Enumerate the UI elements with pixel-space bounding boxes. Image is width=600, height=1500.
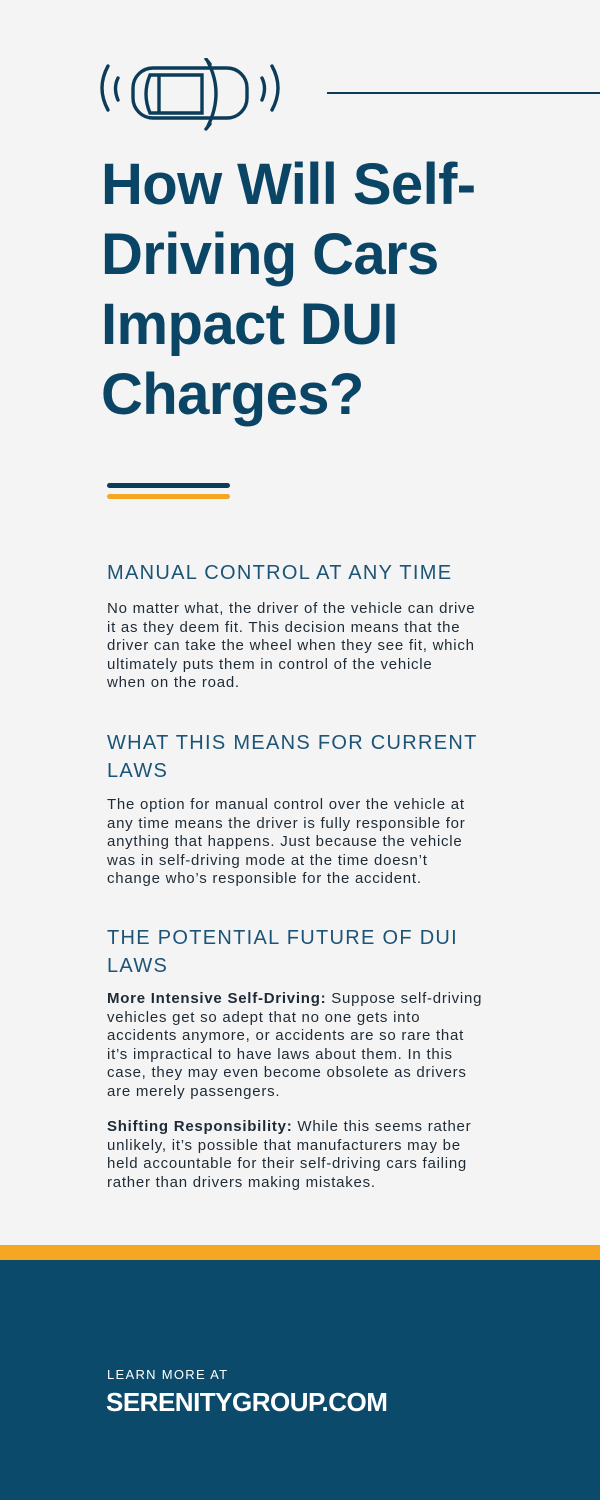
text: shifting responsibility: unlikely, it’s possible that manufacturers may be	[107, 1137, 461, 1154]
text: more intensive self-driving: case, they may even become obsolete as drivers	[107, 1064, 467, 1081]
footer label: LEARN MORE AT	[107, 1367, 228, 1382]
heading: manual control: MANUAL CONTROL AT ANY TIME	[107, 562, 452, 584]
header rule	[327, 92, 600, 94]
text: manual control: ultimately puts them in control of the vehicle	[107, 656, 432, 673]
text: shifting responsibility: rather than drivers making mistakes.	[107, 1174, 376, 1191]
text: more intensive self-driving: More Intensive Self-Driving: Suppose self-driving	[107, 990, 482, 1007]
icon: self-driving car	[100, 58, 280, 131]
text: manual control: it as they deem fit. This decision means that the	[107, 619, 460, 636]
text: more intensive self-driving: vehicles get so adept that no one gets into	[107, 1009, 420, 1026]
text: more intensive self-driving: it’s impractical to have laws about them. In this	[107, 1046, 453, 1063]
text: current laws: was in self-driving mode at the time doesn’t	[107, 852, 428, 869]
text: current laws: The option for manual control over the vehicle at	[107, 796, 465, 813]
footer	[0, 1245, 600, 1500]
text: current laws	[107, 796, 465, 887]
title: How Will Self-Driving Cars Impact DUI Charges?	[101, 152, 476, 427]
heading: future of DUI laws: THE POTENTIAL FUTURE OF DUI LAWS	[107, 927, 458, 977]
text: more intensive self-driving: are merely passengers.	[107, 1083, 280, 1100]
accent bars	[107, 483, 230, 499]
text: shifting responsibility: held accountable for their self-driving cars failing	[107, 1155, 467, 1172]
text: manual control: driver can take the wheel when they see fit, which	[107, 637, 475, 654]
text: more intensive self-driving	[107, 990, 482, 1100]
text: manual control: when on the road.	[107, 674, 240, 691]
text: more intensive self-driving: accidents anymore, or accidents are so rare that	[107, 1027, 464, 1044]
text: manual control	[107, 600, 475, 691]
text: current laws: any time means the driver is fully responsible for	[107, 815, 465, 832]
footer url: SERENITYGROUP.COM	[106, 1387, 387, 1417]
text: shifting responsibility	[107, 1118, 471, 1191]
text: shifting responsibility: Shifting Responsibility: While this seems rather	[107, 1118, 471, 1135]
heading: current laws: WHAT THIS MEANS FOR CURRENT LAWS	[107, 732, 477, 782]
text: current laws: anything that happens. Just because the vehicle	[107, 833, 462, 850]
text: manual control: No matter what, the driver of the vehicle can drive	[107, 600, 475, 617]
text: current laws: change who’s responsible for the accident.	[107, 870, 422, 887]
